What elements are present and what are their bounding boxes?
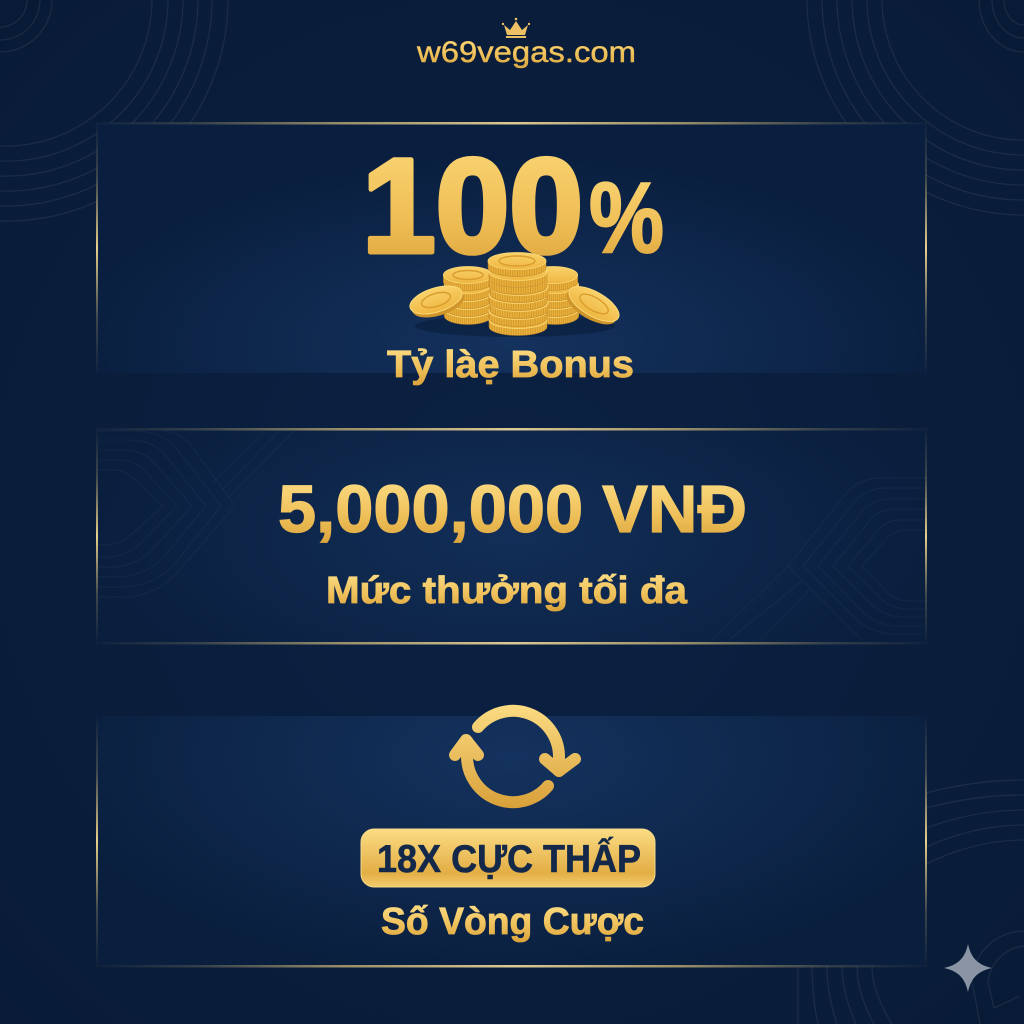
- badge: 18x very low: 18X CỰC THẤP: [377, 837, 641, 881]
- label: wagering rounds: Số Vòng Cược: [381, 901, 644, 943]
- panel: wagering rounds: [96, 711, 928, 968]
- icon: crown: [502, 18, 530, 38]
- panel: bonus rate: [96, 122, 928, 386]
- maximum reward amount: 5,000,000 VNĐ: [278, 472, 747, 547]
- badge: 18x very low: [361, 829, 655, 887]
- icon: gold coin pile: [407, 252, 624, 337]
- logo: w69vegas.com: [416, 18, 636, 69]
- logo: w69vegas.com: w69vegas.com: [416, 36, 636, 69]
- label: bonus rate: Tỷ làẹ Bonus: [387, 344, 634, 386]
- label: maximum reward: Mức thưởng tối đa: [326, 570, 688, 612]
- panel: maximum reward: [96, 428, 928, 644]
- percentage figure: 100: [362, 132, 583, 281]
- icon: sparkle star: [944, 944, 992, 992]
- icon: circular arrows: [455, 711, 575, 802]
- percentage figure: %: [589, 162, 664, 274]
